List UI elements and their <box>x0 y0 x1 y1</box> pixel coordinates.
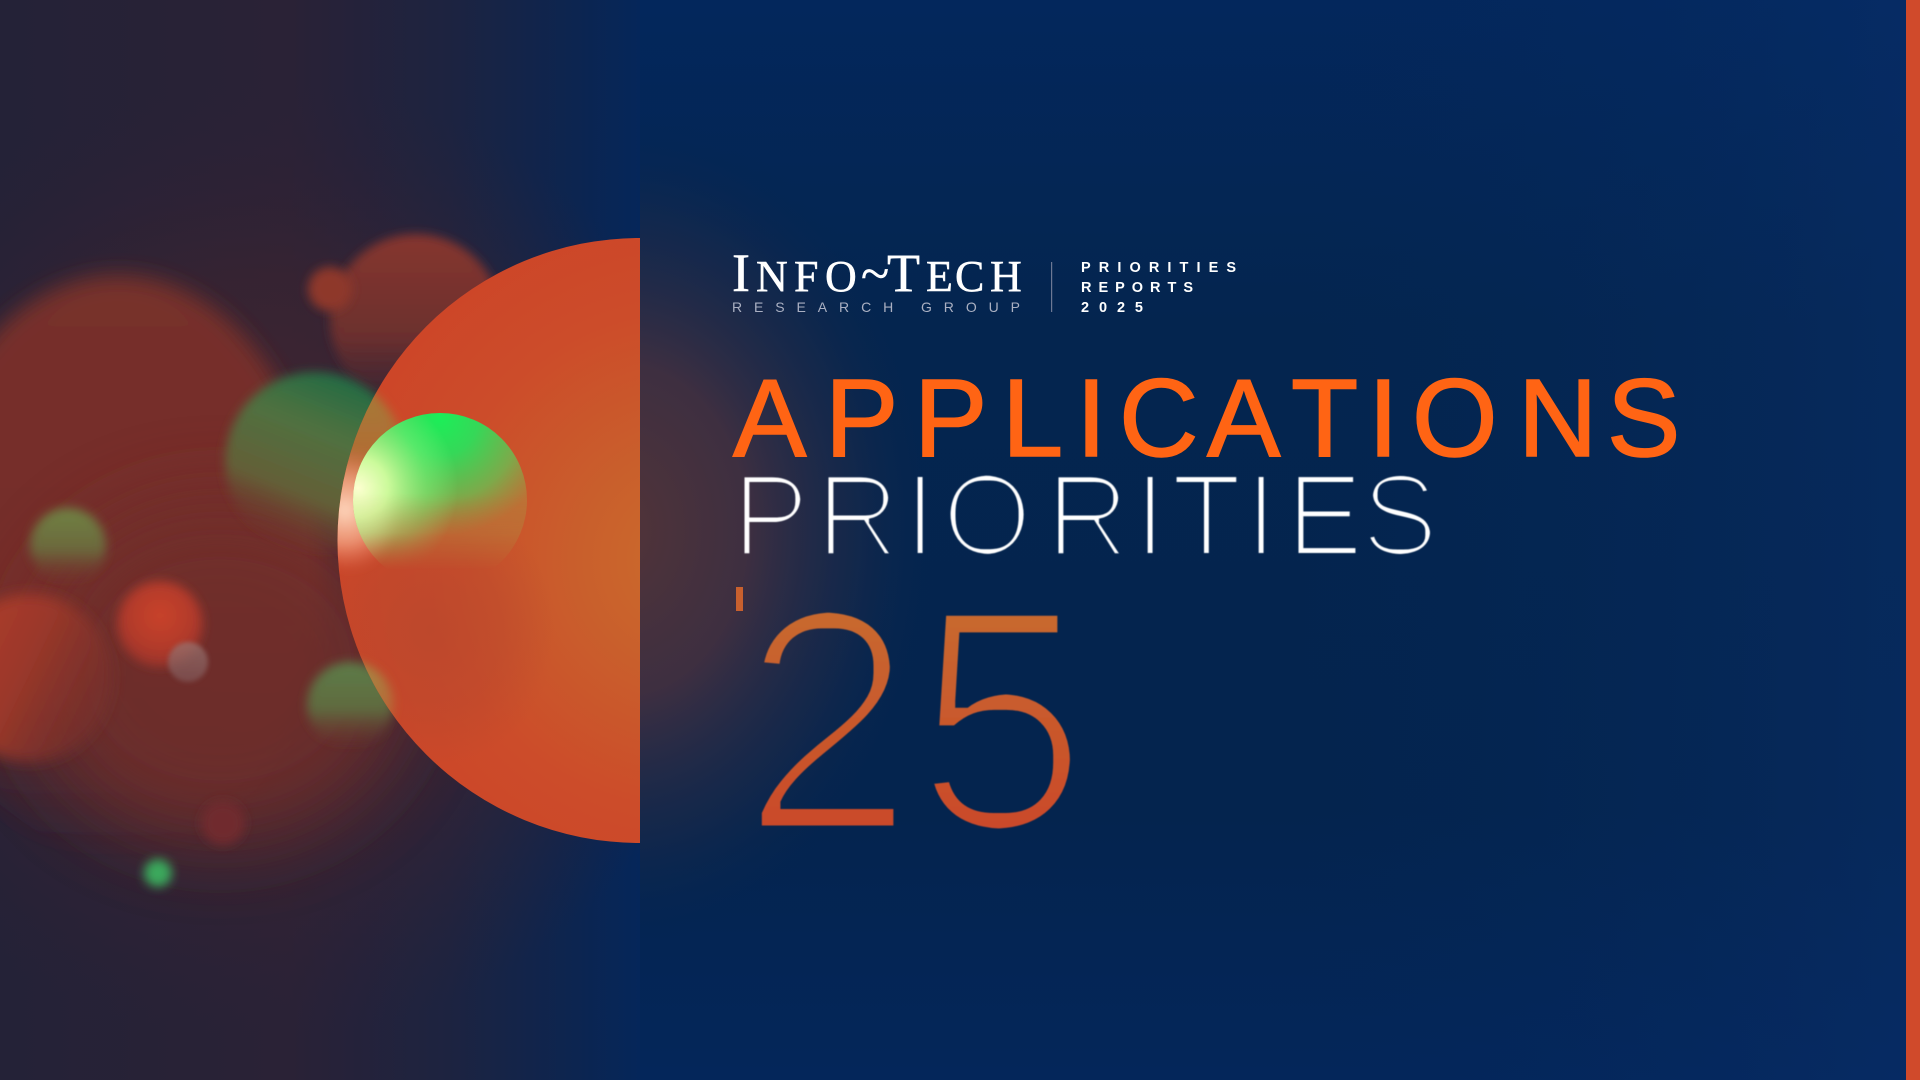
heading: Applications: APPLICATIONS <box>733 357 1680 480</box>
pink glow at disc edge <box>338 454 388 567</box>
logo: Info-Tech Research Group <box>732 243 1022 315</box>
right accent bar <box>1906 0 1920 1080</box>
shaded patch in disc <box>350 558 506 718</box>
sphere: lower olive <box>307 662 393 748</box>
logo wordmark: T <box>887 243 920 303</box>
glow: lower maroon wash <box>30 500 410 840</box>
report label: PRIORITIES <box>1081 260 1236 276</box>
sphere: small red top <box>308 267 352 311</box>
sphere: dim red <box>201 801 245 845</box>
logo wordmark: ECH <box>926 252 1022 301</box>
bright green sphere <box>353 413 527 564</box>
logo tagline: RESEARCH GROUP <box>732 299 1020 315</box>
sphere: large green <box>225 372 405 552</box>
sphere: top maroon <box>330 234 502 406</box>
report label <box>1081 260 1236 316</box>
sphere: mid red <box>117 581 203 667</box>
blurred spheres behind the disc <box>0 234 502 887</box>
sphere: tiny green <box>144 859 172 887</box>
sphere: small pink <box>168 642 208 682</box>
logo wordmark: NFO <box>756 252 857 301</box>
divider <box>1051 262 1052 312</box>
logo wordmark: ~ <box>861 246 889 303</box>
report label: REPORTS <box>1081 280 1193 296</box>
year mark: 25 <box>740 544 1089 896</box>
heading: Priorities: PRIORITIES <box>732 450 1438 580</box>
report label: 2025 <box>1081 300 1143 316</box>
sphere: large maroon <box>0 275 323 855</box>
sphere: left red <box>0 594 112 762</box>
logo wordmark: I <box>732 243 750 303</box>
olive sphere refracted overlay <box>362 658 396 716</box>
green sphere refracted overlay <box>344 391 400 480</box>
year apostrophe <box>736 587 743 611</box>
sphere: small olive <box>30 508 106 584</box>
orange half disc <box>338 238 640 843</box>
